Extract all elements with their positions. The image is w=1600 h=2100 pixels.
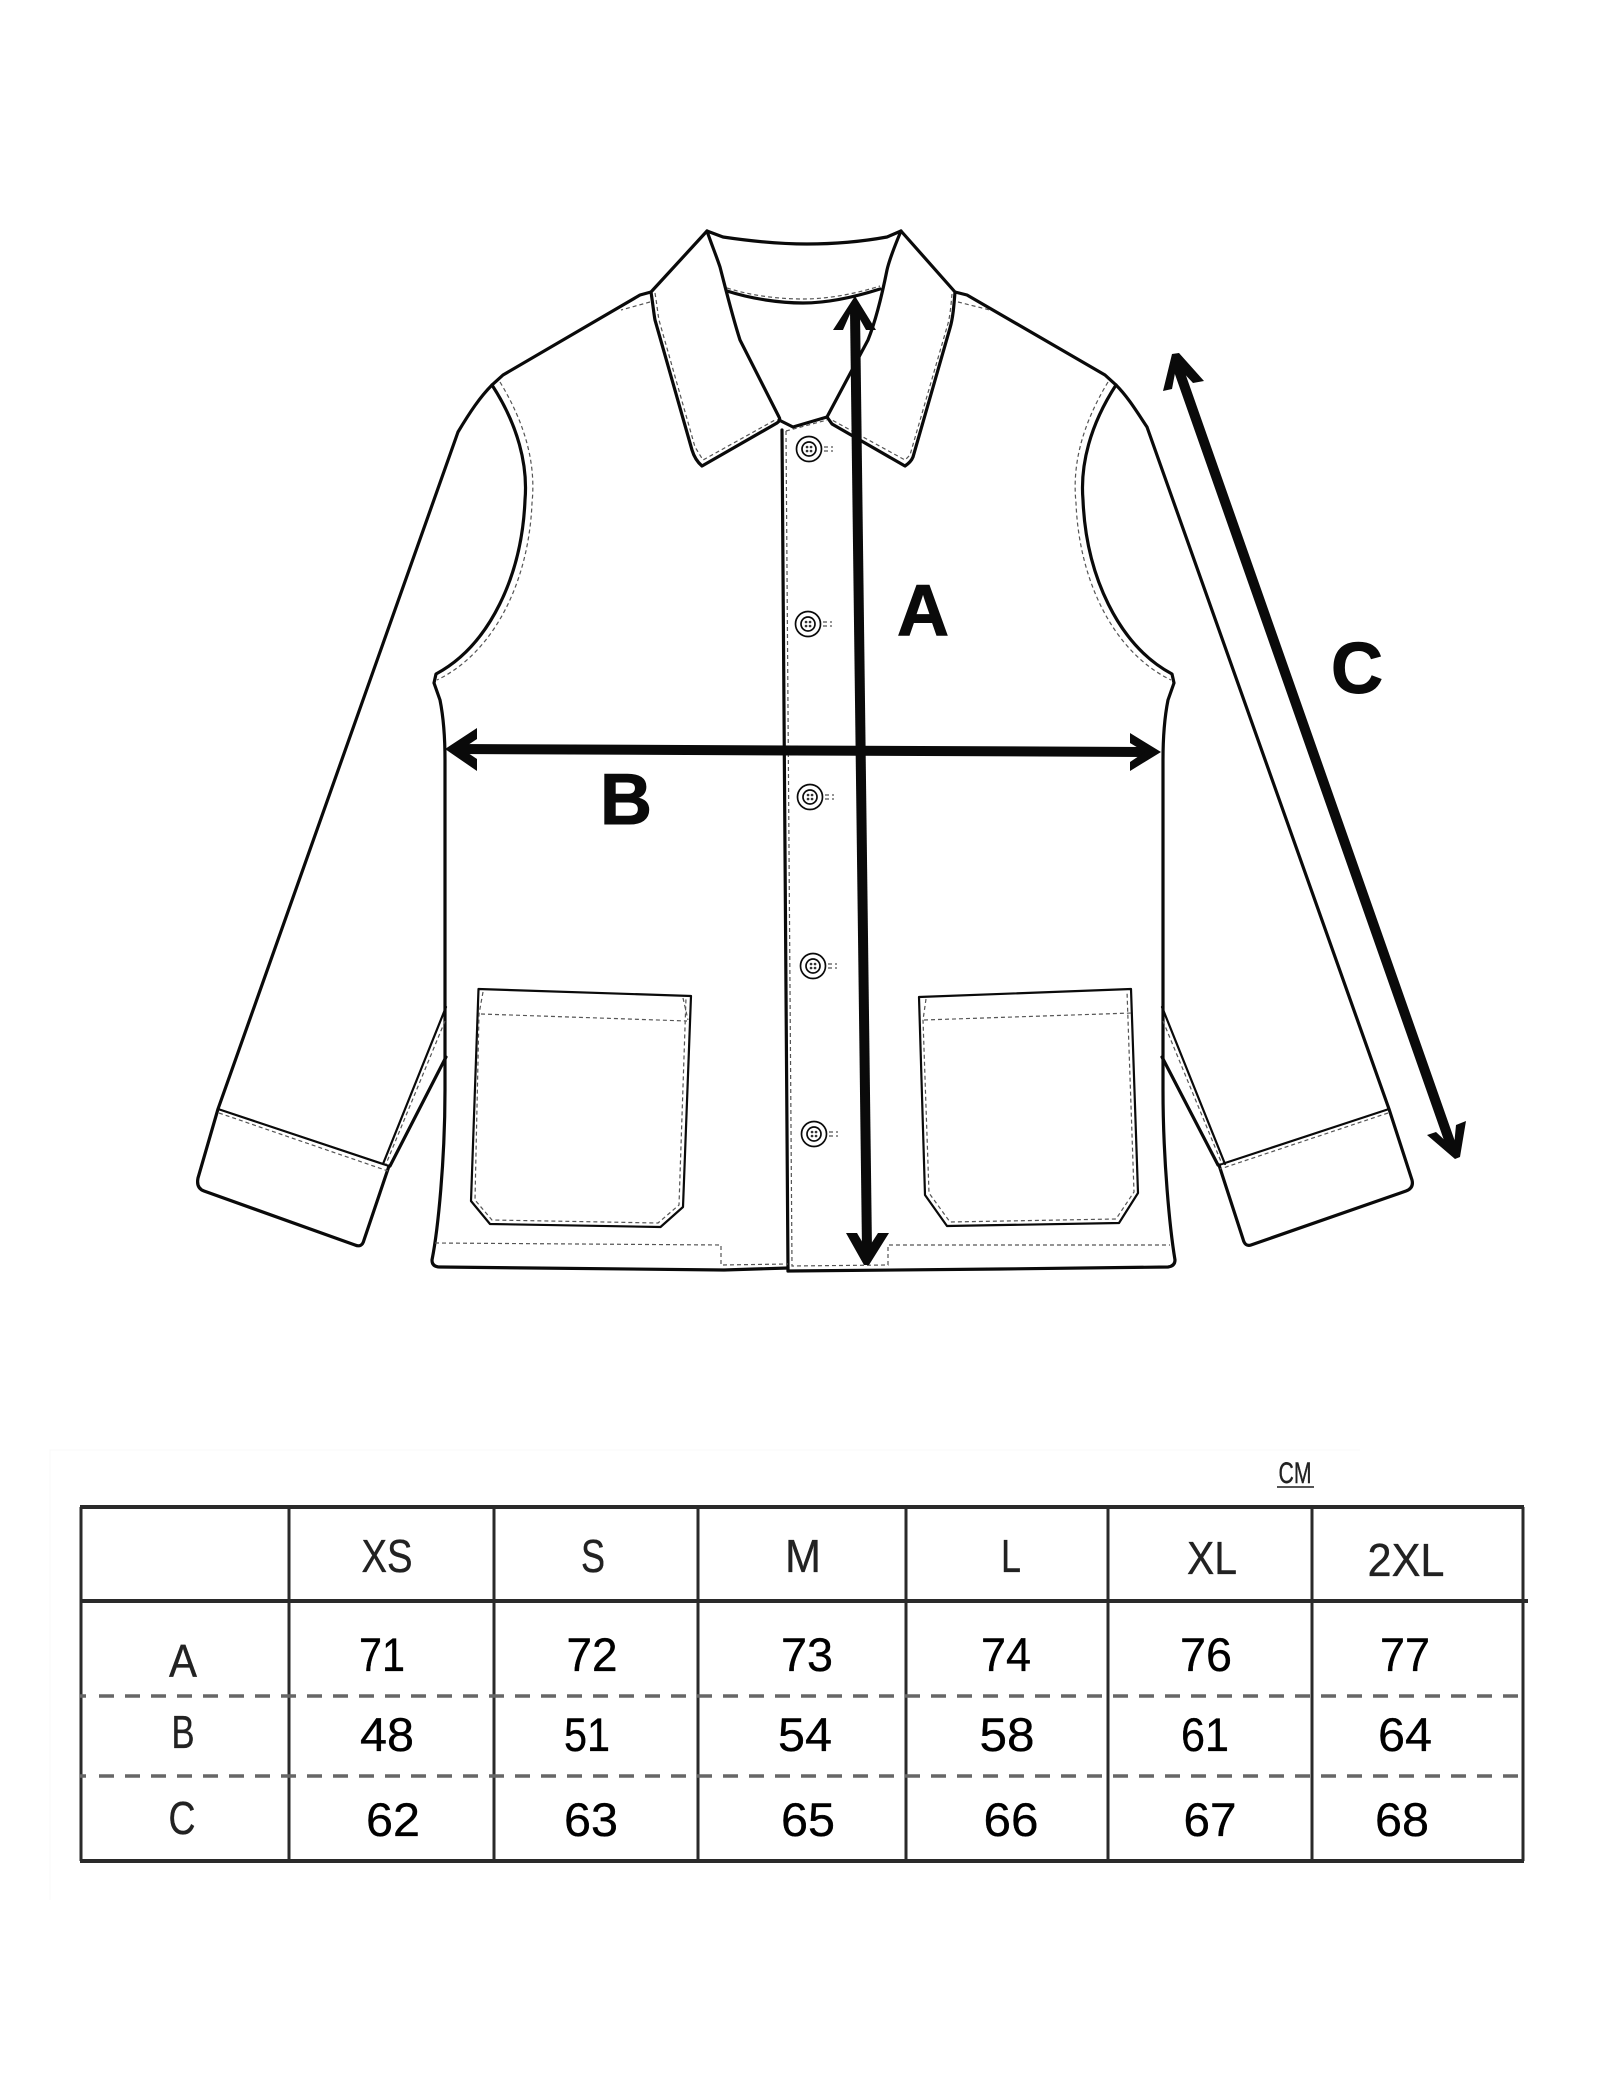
row A measurements: 72 xyxy=(566,1628,618,1681)
row C measurements: 68 xyxy=(1375,1793,1429,1846)
right pocket xyxy=(919,989,1138,1226)
row B measurements: 51 xyxy=(564,1708,610,1761)
label C: C xyxy=(1331,629,1383,709)
size table xyxy=(80,1507,1528,1861)
row B measurements: 48 xyxy=(360,1708,414,1761)
row B measurements xyxy=(172,1706,1432,1761)
size header row: S xyxy=(581,1530,605,1582)
row C measurements: 66 xyxy=(984,1793,1038,1846)
row C measurements: C xyxy=(168,1792,196,1844)
row B measurements: 64 xyxy=(1378,1708,1432,1761)
left pocket xyxy=(471,989,691,1227)
row B measurements: 61 xyxy=(1181,1708,1229,1761)
button 2 xyxy=(796,612,832,636)
row A measurements: 71 xyxy=(359,1628,405,1681)
row B measurements: B xyxy=(172,1706,194,1758)
button 5 xyxy=(802,1122,838,1146)
table grid xyxy=(80,1507,1528,1861)
row C measurements xyxy=(168,1792,1429,1846)
label A: A xyxy=(897,571,949,651)
button 3 xyxy=(798,784,834,810)
row A measurements: 77 xyxy=(1380,1628,1430,1681)
arrow A: body length xyxy=(833,296,889,1265)
jacket technical drawing xyxy=(198,231,1412,1271)
collar xyxy=(651,231,955,466)
size header row: 2XL xyxy=(1368,1534,1444,1586)
button 1 xyxy=(796,436,833,462)
row A measurements: 73 xyxy=(781,1628,833,1681)
row A measurements: 74 xyxy=(981,1628,1031,1681)
unit label CM: CM xyxy=(1278,1457,1312,1490)
row A measurements xyxy=(169,1628,1430,1687)
row C measurements: 65 xyxy=(781,1793,835,1846)
left sleeve and cuff xyxy=(198,385,492,1246)
row C measurements: 62 xyxy=(366,1793,420,1846)
size header row: XS xyxy=(362,1530,412,1582)
right sleeve and cuff xyxy=(1116,385,1412,1245)
row A measurements: A xyxy=(169,1635,197,1687)
size header row xyxy=(362,1530,1444,1586)
label B: B xyxy=(600,760,652,840)
arrow C: sleeve length xyxy=(1163,353,1466,1159)
size header row: XL xyxy=(1187,1532,1237,1584)
size header row: L xyxy=(1001,1530,1021,1582)
jacket body xyxy=(432,292,1175,1271)
button 4 xyxy=(800,954,837,978)
arrow B: chest width xyxy=(445,728,1161,771)
row A measurements: 76 xyxy=(1180,1628,1232,1681)
row C measurements: 67 xyxy=(1184,1793,1236,1846)
row C measurements: 63 xyxy=(564,1793,618,1846)
row B measurements: 58 xyxy=(980,1708,1034,1761)
row B measurements: 54 xyxy=(778,1708,832,1761)
size header row: M xyxy=(785,1530,821,1582)
